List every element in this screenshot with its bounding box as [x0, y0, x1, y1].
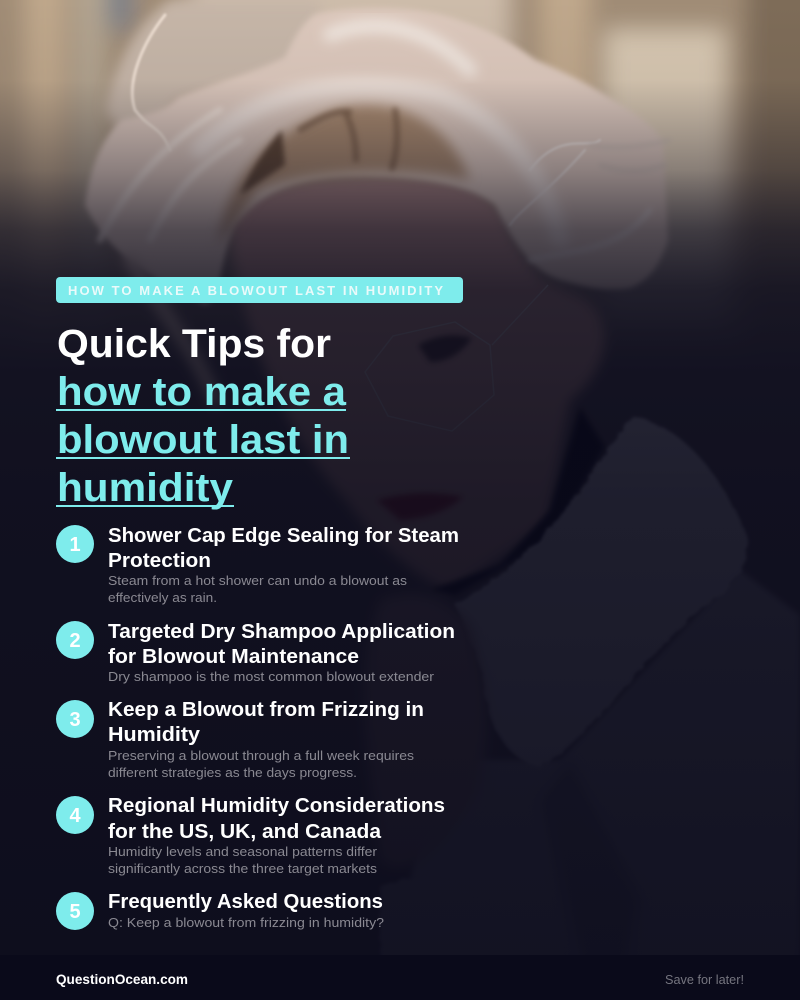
tip 5: Q: Keep a blowout from frizzing in humidity? [108, 915, 384, 930]
title: humidity [57, 466, 234, 510]
brown hair roots [218, 105, 470, 245]
tip 3: 3 [69, 709, 81, 731]
tip 5: 5 [69, 901, 81, 923]
face [230, 178, 604, 592]
tip 1: effectively as rain. [108, 590, 217, 605]
title: Quick Tips for [57, 322, 331, 366]
tip 1: Shower Cap Edge Sealing for Steam [108, 525, 459, 547]
tip 1 [56, 525, 459, 605]
footer bar: Save for later! [665, 973, 744, 987]
hair strands [100, 15, 670, 400]
turtleneck [430, 408, 605, 596]
tip 2: Targeted Dry Shampoo Application [108, 621, 455, 643]
tip 1: Protection [108, 550, 211, 572]
tip 1: 1 [69, 534, 81, 556]
tip 3: Preserving a blowout through a full week requires [108, 748, 415, 763]
tip 5: Frequently Asked Questions [108, 891, 383, 913]
tip 3: different strategies as the days progress. [108, 765, 357, 780]
coat body [380, 570, 800, 1000]
backdrop fade into dark [0, 170, 800, 370]
tip 2: for Blowout Maintenance [108, 646, 359, 668]
glasses [365, 285, 548, 431]
footer bar: QuestionOcean.com [56, 972, 188, 987]
tip 2: 2 [69, 630, 81, 652]
fur collar [455, 417, 748, 767]
tip 5 [56, 891, 384, 930]
hair mass [85, 8, 668, 305]
tip 2 [56, 621, 455, 684]
thin upper-left hair [105, 0, 320, 150]
eye [418, 335, 472, 362]
tip 2: Dry shampoo is the most common blowout extender [108, 669, 435, 684]
footer bar [0, 955, 800, 1000]
tip 3: Keep a Blowout from Frizzing in [108, 699, 424, 721]
tip 3: Humidity [108, 724, 201, 746]
hand [364, 594, 487, 867]
title: how to make a [57, 370, 347, 414]
tip 4: Regional Humidity Considerations [108, 795, 445, 817]
tip 3 [56, 699, 424, 780]
title: blowout last in [57, 418, 349, 462]
tip 4: 4 [69, 805, 81, 827]
lips [377, 493, 463, 520]
tip 4: significantly across the three target markets [108, 861, 378, 876]
title [56, 322, 350, 510]
tip 1: Steam from a hot shower can undo a blowout as [108, 573, 408, 588]
tag badge: HOW TO MAKE A BLOWOUT LAST IN HUMIDITY [68, 283, 443, 298]
tip 4: for the US, UK, and Canada [108, 821, 382, 843]
tag badge [56, 277, 463, 303]
blurred backdrop stripes [0, 0, 800, 400]
tip 4: Humidity levels and seasonal patterns differ [108, 844, 378, 859]
tip 4 [56, 795, 445, 876]
